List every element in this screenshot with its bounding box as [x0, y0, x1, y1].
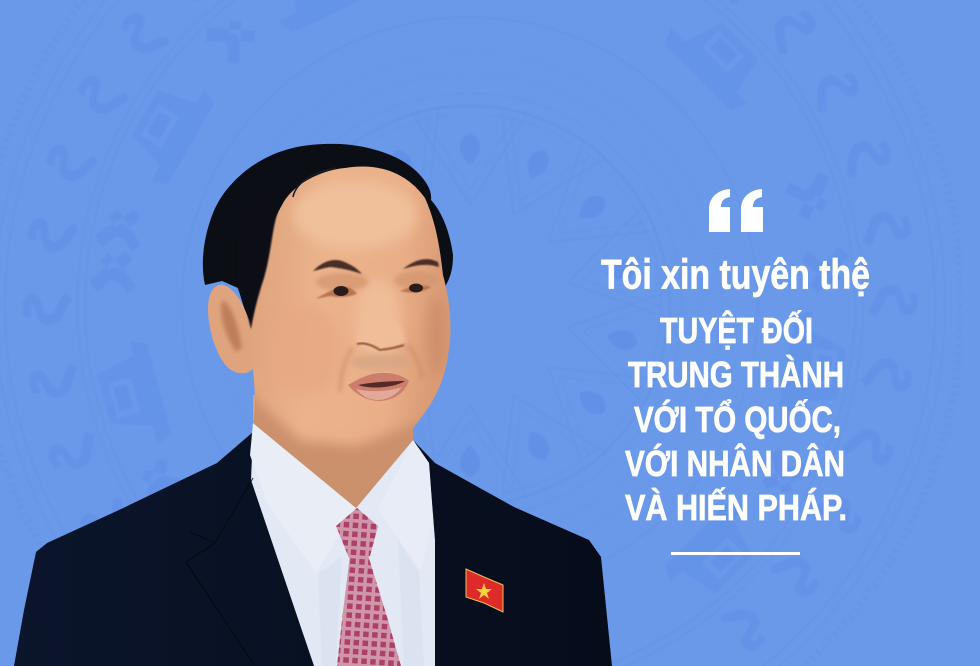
quote line 4: VỚI NHÂN DÂN	[625, 442, 845, 484]
mustache shadow	[350, 354, 410, 370]
nose	[356, 321, 405, 351]
closing rule	[671, 552, 800, 555]
sideburn and hairline	[238, 200, 280, 329]
icon: quotation marks	[709, 189, 763, 232]
forehead light	[293, 181, 417, 249]
flag pin	[466, 569, 503, 612]
face	[240, 167, 450, 520]
quote line 3: VỚI TỔ QUỐC,	[634, 397, 841, 440]
cheek warm	[300, 315, 330, 386]
shirt shadow	[318, 540, 424, 666]
collar right	[378, 440, 433, 571]
mouth	[348, 373, 409, 401]
hair	[203, 144, 453, 330]
ear	[208, 285, 258, 373]
shirt	[250, 423, 435, 666]
portrait	[14, 144, 612, 666]
tie	[336, 508, 401, 666]
quote line 1: TUYỆT ĐỐI	[660, 309, 813, 351]
quote line 2: TRUNG THÀNH	[628, 354, 844, 395]
neck	[253, 395, 413, 508]
right eyebrow	[403, 259, 439, 269]
left eyebrow	[313, 260, 362, 274]
left eye	[315, 286, 357, 299]
nose light	[357, 282, 401, 331]
brow socket shadow	[316, 273, 368, 291]
lapel edge	[186, 478, 255, 666]
right eye	[400, 284, 431, 292]
intro text: Tôi xin tuyên thệ	[601, 250, 870, 298]
hair strand	[293, 168, 336, 197]
nasolabial folds	[340, 345, 422, 392]
quote block	[601, 189, 870, 555]
suit jacket	[14, 432, 612, 666]
quote line 5: VÀ HIẾN PHÁP.	[625, 487, 847, 528]
collar left	[250, 423, 356, 573]
jaw shadow	[253, 393, 419, 508]
